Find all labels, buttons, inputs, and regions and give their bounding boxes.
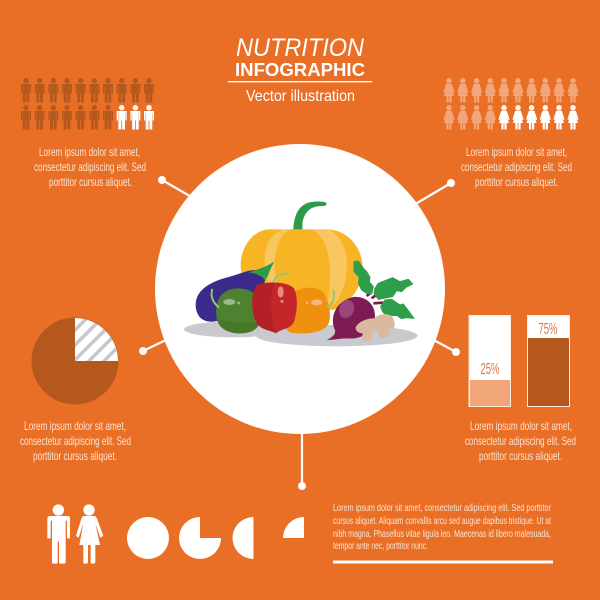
title: Vector illustration: [246, 88, 355, 105]
red pepper: [252, 273, 297, 333]
title: INFOGRAPHIC: [235, 59, 365, 80]
bar chart: 75 percent: [527, 315, 570, 407]
title: NUTRITION: [236, 34, 365, 62]
text block: top left: Lorem ipsum dolor sit amet,: [39, 145, 140, 159]
title: [228, 34, 372, 105]
text block: top right: [461, 145, 572, 189]
text block: left: porttitor cursus aliquet.: [33, 449, 117, 463]
icon: man and woman: [47, 504, 103, 564]
icon: full circle: [127, 517, 169, 559]
text block: left: [20, 419, 131, 463]
connector lines and dots: [139, 176, 460, 490]
text block: right: porttitor cursus aliquet.: [479, 449, 562, 463]
green pepper: [212, 288, 261, 333]
women pictogram row: [443, 78, 579, 130]
pie chart: [32, 318, 118, 404]
text block: left: consectetur adipiscing elit. Sed: [20, 434, 131, 448]
text block: top left: porttitor cursus aliquet.: [49, 175, 132, 189]
icon: half pie: [233, 517, 254, 559]
rule under paragraph: [333, 560, 553, 564]
mushrooms: [356, 314, 395, 342]
text block: bottom paragraph: tempor ante nec, porttitor nunc.: [333, 540, 428, 552]
text block: top left: [34, 145, 146, 189]
plate shadow: [184, 321, 418, 346]
men pictogram row: [21, 78, 154, 130]
text block: right: [465, 419, 576, 463]
pumpkin: [241, 202, 363, 310]
text block: bottom paragraph: [333, 502, 551, 552]
icon: quarter pie: [283, 517, 304, 538]
text block: top left: consectetur adipiscing elit. Sed: [34, 160, 146, 174]
vegetables illustration: [184, 202, 418, 346]
bar chart: 25 percent: [468, 315, 511, 407]
icon: three-quarter pie: [179, 517, 221, 559]
text block: top right: porttitor cursus aliquet.: [475, 175, 558, 189]
central white circle: [155, 144, 445, 434]
orange pepper: [287, 288, 334, 333]
bar chart: 25 percent: 25%: [480, 361, 500, 378]
beetroot with leaves: [327, 261, 414, 340]
bar chart: 75 percent: 75%: [538, 321, 558, 338]
eggplant: [196, 261, 274, 322]
text block: left: Lorem ipsum dolor sit amet,: [24, 419, 126, 433]
